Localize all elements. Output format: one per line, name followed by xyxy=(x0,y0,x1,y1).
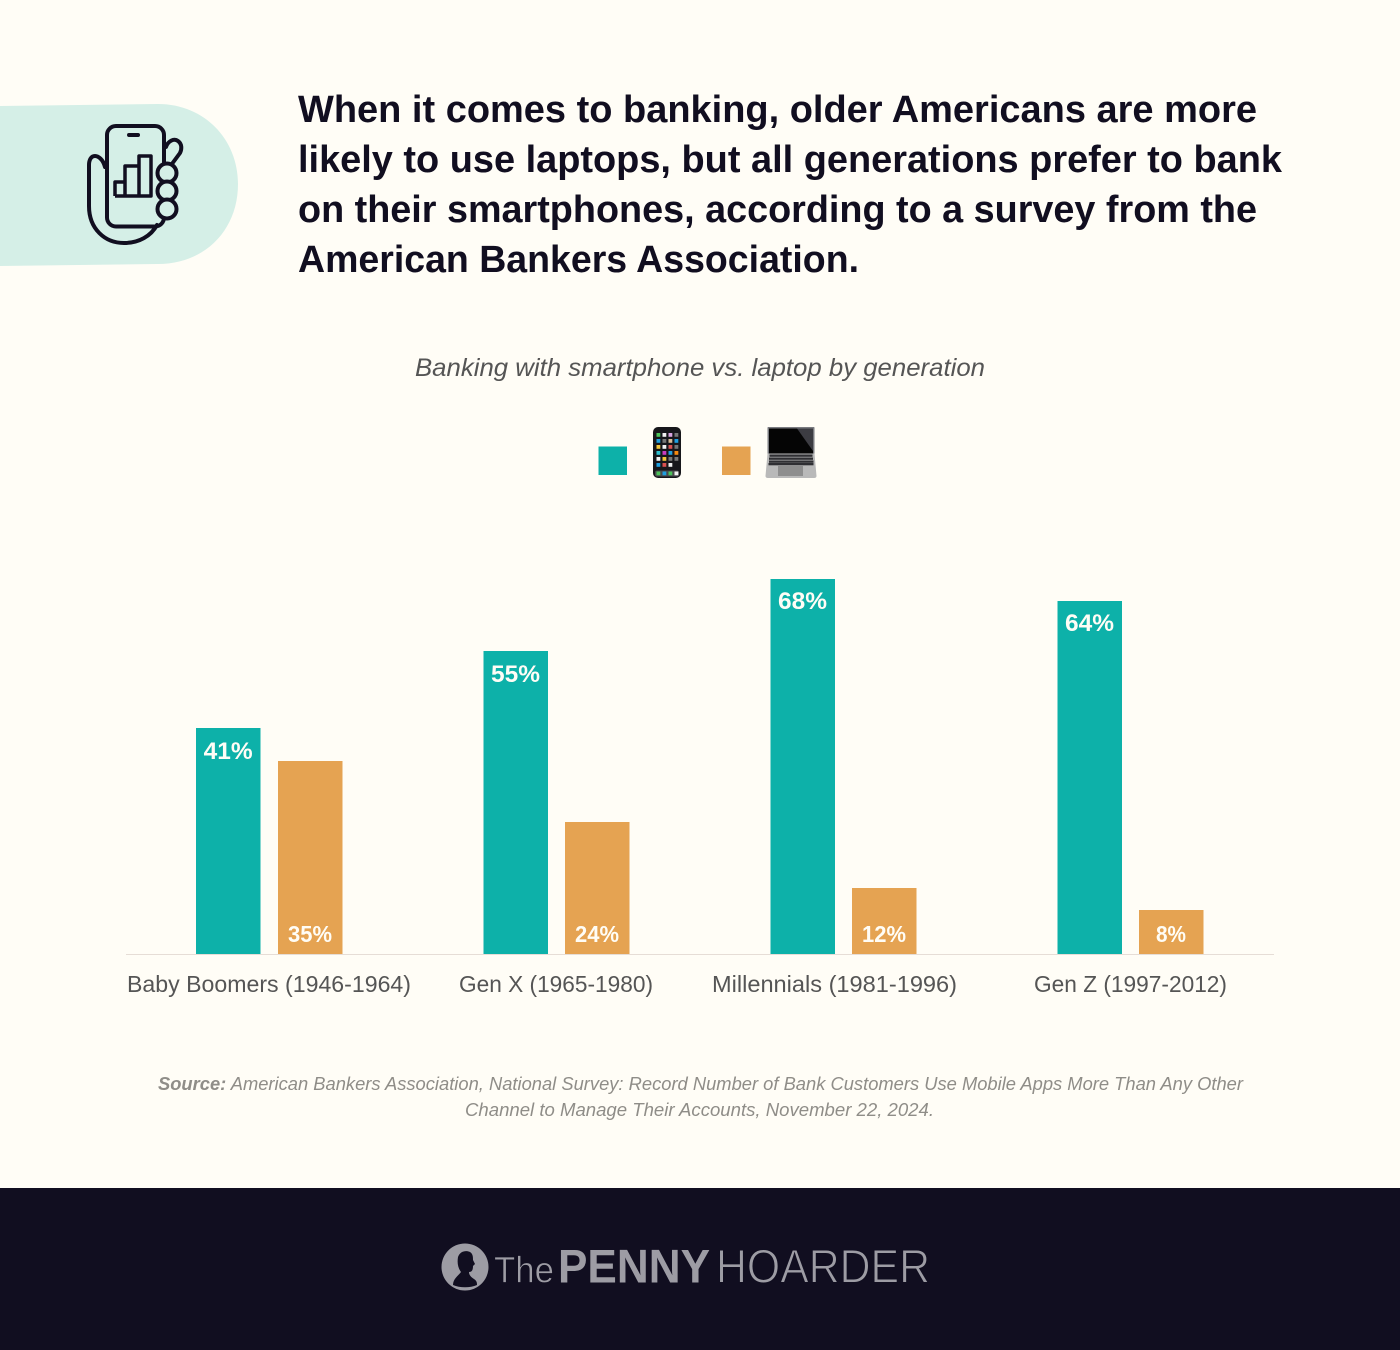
logo: The Penny Hoarder: The xyxy=(494,1250,554,1290)
icon: smartphone xyxy=(653,427,681,478)
group: Gen Z: Gen Z (1997-2012) xyxy=(1034,971,1227,997)
logo: The Penny Hoarder: PENNY xyxy=(558,1240,710,1292)
group: Millennials: 68% xyxy=(778,588,827,615)
group: Baby Boomers: Baby Boomers (1946-1964) xyxy=(127,971,411,997)
title: likely to use laptops, but all generations prefer to bank xyxy=(298,139,1283,181)
group: Gen Z xyxy=(1034,601,1227,997)
axis line xyxy=(126,954,1274,955)
legend swatch: smartphone xyxy=(598,446,627,475)
group: Millennials xyxy=(712,579,957,997)
icon: hand holding phone with bar chart xyxy=(89,126,181,243)
header icon panel xyxy=(0,104,238,266)
group: Baby Boomers: 35% xyxy=(288,921,332,947)
legend xyxy=(598,427,816,478)
group: Gen X: 55% xyxy=(491,661,540,688)
group: Gen X: 24% xyxy=(575,921,619,947)
group: Gen Z: 8% xyxy=(1156,921,1186,947)
legend swatch: laptop xyxy=(722,446,750,475)
icon: silhouette coin xyxy=(442,1244,488,1290)
title: on their smartphones, according to a survey from the xyxy=(298,189,1257,231)
group: Millennials: 12% xyxy=(862,921,906,947)
footer band xyxy=(0,1188,1400,1350)
logo: The Penny Hoarder: HOARDER xyxy=(716,1240,930,1292)
group: Gen X xyxy=(459,651,653,997)
group: Millennials: Millennials (1981-1996) xyxy=(712,971,957,997)
title: When it comes to banking, older Americans are more xyxy=(298,89,1257,131)
group: Baby Boomers: 41% xyxy=(204,738,253,765)
logo: The Penny Hoarder xyxy=(442,1240,930,1292)
group: Baby Boomers xyxy=(127,728,411,997)
source note: Channel to Manage Their Accounts, November 22, 2024. xyxy=(465,1100,934,1120)
group: Gen Z: 64% xyxy=(1065,610,1114,637)
source note xyxy=(158,1074,1244,1120)
bar chart xyxy=(126,579,1274,997)
title xyxy=(298,89,1283,281)
group: Gen X: Gen X (1965-1980) xyxy=(459,971,653,997)
chart subtitle: Banking with smartphone vs. laptop by generation xyxy=(415,354,985,382)
title: American Bankers Association. xyxy=(298,239,859,281)
source note: Source: American Bankers Association, National Survey: Record Number of Bank Customers Use Mobile Apps More Than Any Other xyxy=(158,1074,1244,1094)
icon: laptop xyxy=(766,427,816,478)
